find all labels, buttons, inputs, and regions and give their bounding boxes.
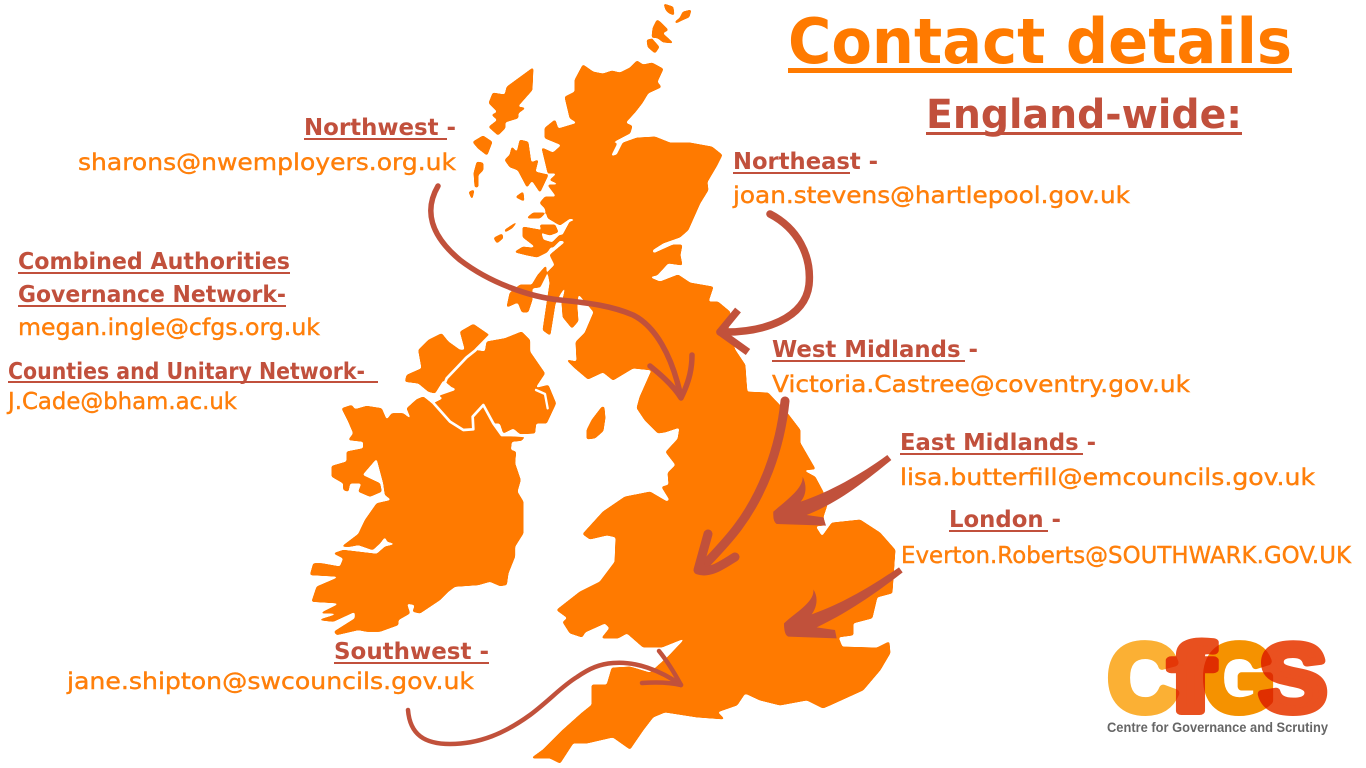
arrow: Northeast — [720, 214, 809, 352]
map: County Donegal — [405, 324, 489, 393]
logo letters: f — [1169, 625, 1214, 732]
map: Isle of Man — [587, 407, 605, 439]
heading: England-wide: England-wide: — [926, 92, 1242, 138]
map: British Isles — [310, 4, 895, 763]
logo letters: S — [1259, 625, 1327, 732]
logo letters: C — [1108, 625, 1178, 732]
title: Contact details — [788, 5, 1292, 78]
map: Great Britain mainland — [532, 61, 895, 763]
arrow: East Midlands — [773, 455, 891, 526]
contact: Northeast: Northeast - — [733, 149, 878, 175]
contact: Southwest — [66, 639, 489, 695]
map: land masses — [310, 4, 895, 763]
contact: Counties and Unitary Network: J.Cade@bham.ac.uk — [6, 389, 238, 415]
contact: Northeast — [732, 149, 1131, 209]
contact: West Midlands: West Midlands - — [772, 337, 978, 363]
contact: Southwest: Southwest - — [334, 639, 489, 665]
contact: Combined Authorities Governance Network: Governance Network- — [18, 282, 286, 308]
contact: London: London - — [949, 507, 1061, 533]
contact: Northwest: Northwest - — [304, 115, 456, 141]
contact: Counties and Unitary Network — [6, 359, 378, 415]
contact: Northeast: joan.stevens@hartlepool.gov.uk — [732, 183, 1131, 209]
logo tagline: Centre for Governance and Scrutiny — [1107, 720, 1328, 735]
contact: Counties and Unitary Network: Counties and Unitary Network- — [8, 359, 365, 385]
contact: West Midlands: Victoria.Castree@coventry.gov.uk — [772, 372, 1191, 398]
contact: London: Everton.Roberts@SOUTHWARK.GOV.UK — [901, 543, 1352, 569]
contact: East Midlands: East Midlands - — [900, 430, 1096, 456]
map: Northern Ireland — [433, 332, 556, 434]
logo letters: G — [1203, 625, 1275, 732]
arrow: Northwest — [431, 186, 692, 398]
contact: East Midlands: lisa.butterfill@emcouncils.gov.uk — [900, 465, 1316, 491]
contact: Combined Authorities Governance Network: megan.ingle@cfgs.org.uk — [18, 315, 321, 341]
contact: East Midlands — [900, 430, 1316, 491]
contact: Southwest: jane.shipton@swcouncils.gov.uk — [66, 669, 475, 695]
contact: Combined Authorities Governance Network — [18, 249, 321, 341]
contact: Combined Authorities Governance Network: Combined Authorities — [18, 249, 290, 275]
contact: Northwest: sharons@nwemployers.org.uk — [78, 150, 457, 176]
logo: CfGS — [1107, 625, 1328, 735]
arrow: West Midlands — [698, 401, 785, 571]
contact: London — [901, 507, 1352, 569]
map: Shetland and Orkney — [647, 4, 691, 53]
logo letters — [1108, 625, 1327, 732]
arrow: London — [784, 567, 903, 638]
map: Hebrides and west coast islands — [469, 68, 568, 312]
arrow: Southwest — [408, 651, 681, 744]
contact: West Midlands — [772, 337, 1191, 398]
map: Irish border and Strangford Lough — [432, 336, 548, 436]
map: Republic of Ireland — [310, 397, 525, 635]
contact: Northwest — [78, 115, 457, 176]
